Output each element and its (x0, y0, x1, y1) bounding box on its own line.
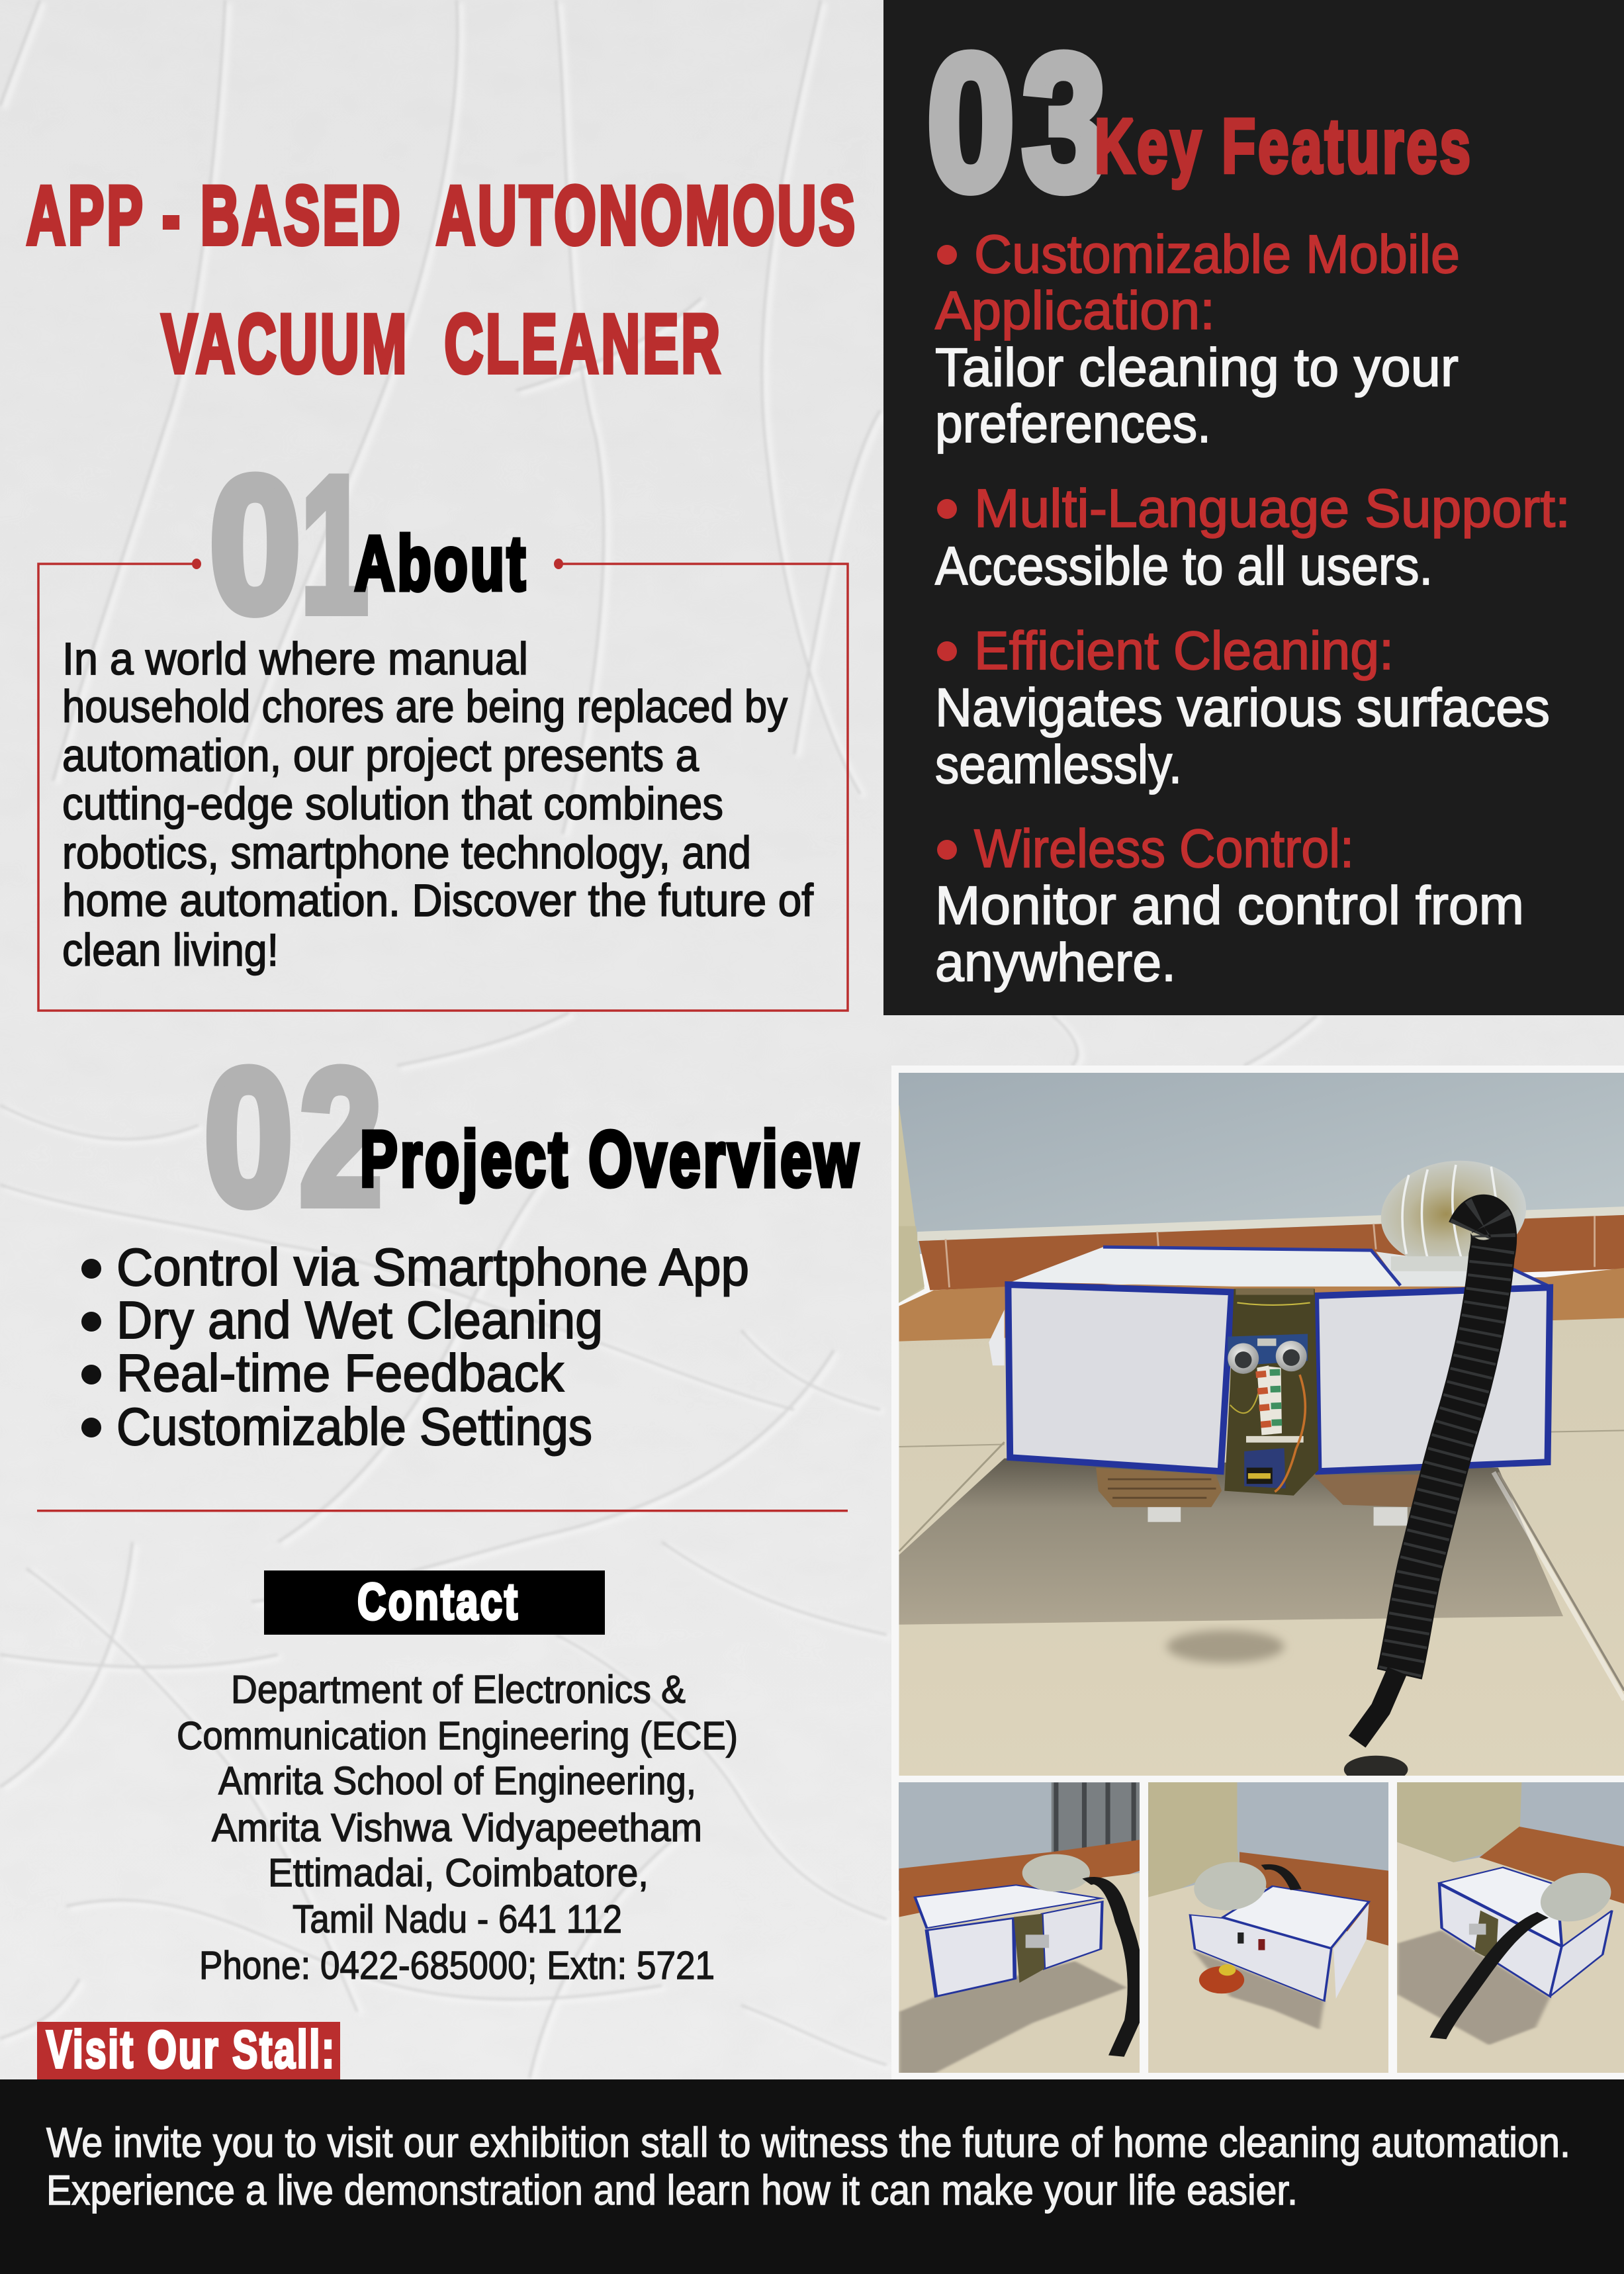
contact address text: Ettimadai, Coimbatore, (268, 1851, 649, 1895)
photo: hose-side view thumbnail (1395, 1780, 1624, 2076)
feature: wireless control: anywhere. (935, 932, 1176, 993)
contact heading box (264, 1570, 605, 1635)
feature: efficient cleaning: Navigates various surfaces (935, 678, 1550, 738)
contact address text: Communication Engineering (ECE) (177, 1714, 738, 1758)
feature: efficient cleaning (935, 621, 1550, 795)
invitation text: Experience a live demonstration and learn how it can make your life easier. (46, 2167, 1298, 2214)
about body text: household chores are being replaced by (62, 681, 788, 732)
photo frame (887, 1059, 1624, 2079)
about body text: home automation. Discover the future of (62, 875, 814, 926)
box body (989, 1310, 1005, 1365)
feature: multi-language support: Multi-Language Support: (974, 478, 1570, 539)
feature: wireless control (935, 819, 1524, 993)
feature: customizable mobile application: Customizable Mobile (974, 224, 1460, 285)
servo (1246, 1436, 1304, 1443)
section number 01 (210, 437, 368, 652)
main title: APP - BASED AUTONOMOUS (26, 169, 858, 262)
contact address text: Amrita School of Engineering, (218, 1759, 696, 1803)
photo: left view thumbnail (896, 1780, 1146, 2076)
feature: customizable mobile application: Tailor cleaning to your (935, 338, 1459, 398)
about body text: In a world where manual (62, 633, 528, 684)
feature: multi-language support: Accessible to all users. (935, 536, 1433, 596)
about heading: About (355, 520, 528, 606)
panel: key features (883, 0, 1624, 1015)
main title (26, 169, 858, 390)
section number 03: 3 (1022, 15, 1106, 230)
section number 03: 0 (927, 15, 1015, 230)
key features heading: Key Features (1095, 103, 1473, 189)
panel: contact (177, 1570, 738, 1987)
visit our stall label: Visit Our Stall: (46, 2020, 336, 2079)
contact address text: Amrita Vishwa Vidyapeetham (212, 1806, 702, 1850)
panel: about (38, 437, 848, 1011)
photo: main vacuum front view (887, 1059, 1624, 1784)
track units (1096, 1468, 1222, 1507)
project overview heading: Project Overview (360, 1115, 861, 1203)
about body text: robotics, smartphone technology, and (62, 827, 751, 878)
panel: project overview (81, 1030, 861, 1456)
about body text: cutting-edge solution that combines (62, 778, 723, 829)
feature: efficient cleaning: Efficient Cleaning: (974, 621, 1394, 681)
overview bullet list (81, 1238, 749, 1456)
overview bullet list: Customizable Settings (116, 1397, 592, 1456)
about body text: automation, our project presents a (62, 730, 699, 781)
section number 03 (927, 15, 1106, 230)
contact address text: Department of Electronics & (231, 1668, 686, 1711)
about body text: clean living! (62, 925, 279, 976)
feature: efficient cleaning: seamlessly. (935, 735, 1182, 795)
feature: customizable mobile application (935, 224, 1460, 454)
main title: VACUUM CLEANER (161, 298, 723, 390)
contact address text: Phone: 0422-685000; Extn: 5721 (199, 1944, 715, 1987)
contact address text (177, 1668, 738, 1987)
feature: customizable mobile application: Application: (935, 281, 1215, 341)
overview bullet list: Dry and Wet Cleaning (116, 1291, 603, 1349)
section number 02: 2 (300, 1030, 382, 1244)
feature: wireless control: Wireless Control: (974, 819, 1354, 879)
contact address text: Tamil Nadu - 641 112 (293, 1897, 622, 1941)
bottle and hose (1380, 1161, 1526, 1256)
bottom invitation bar (0, 2020, 1624, 2274)
ultrasonic sensor (1228, 1334, 1308, 1367)
section number 02: 0 (204, 1030, 293, 1244)
photo: rear view thumbnail (1146, 1780, 1395, 2076)
about border with dot ends (38, 559, 848, 1011)
overview bullet list: Control via Smartphone App (116, 1238, 749, 1296)
overview bullet list: Real-time Feedback (116, 1343, 564, 1402)
feature: customizable mobile application: preferences. (935, 394, 1211, 454)
section number 01: 0 (210, 437, 300, 652)
section number 02 (204, 1030, 382, 1244)
feature: wireless control: Monitor and control from (935, 876, 1524, 936)
feature: multi-language support (935, 478, 1570, 596)
section number 01: 1 (301, 437, 368, 652)
contact heading box: Contact (357, 1572, 519, 1631)
invitation text (46, 2120, 1570, 2214)
about body text (62, 633, 814, 976)
